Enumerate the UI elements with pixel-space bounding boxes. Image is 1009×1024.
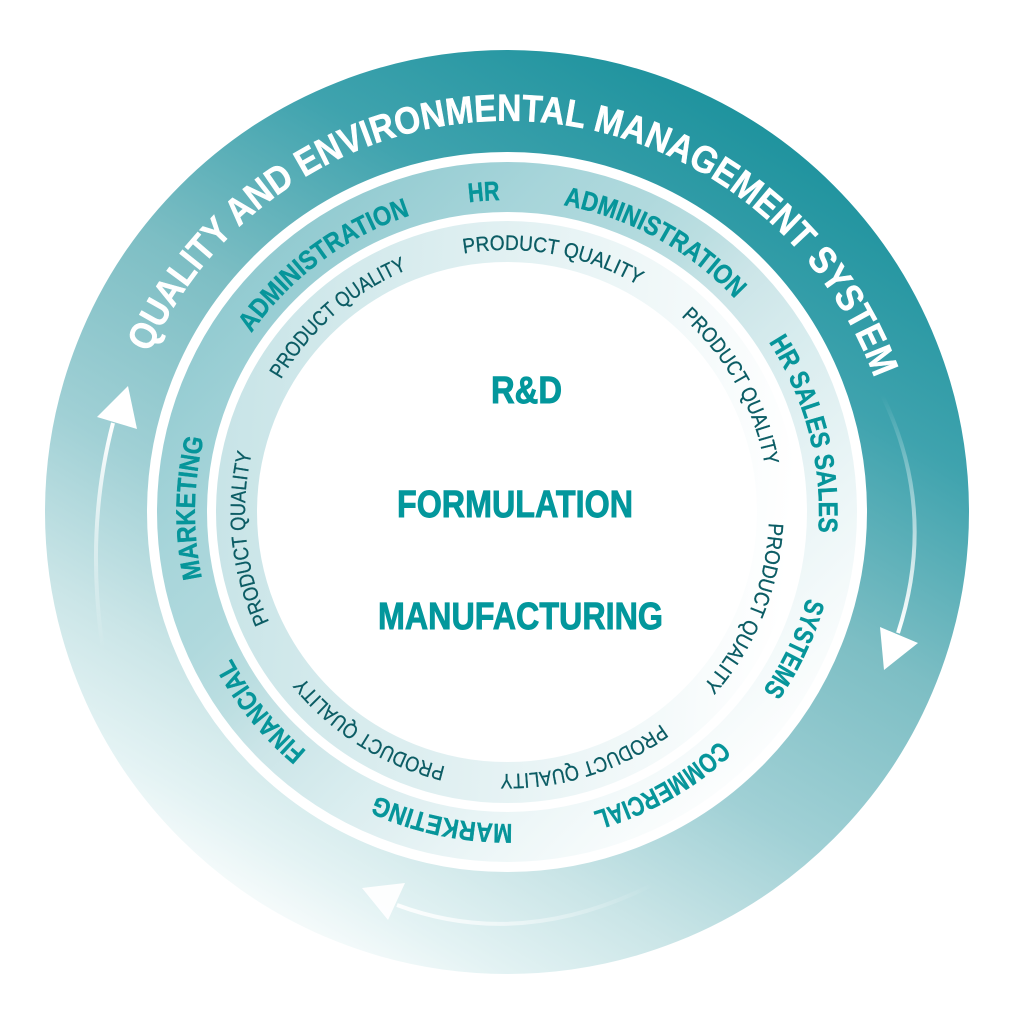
label: product quality lower right: PRODUCT QUALITY <box>500 724 668 789</box>
label: marketing bottom: MARKETING <box>372 798 512 843</box>
middle ring: business functions <box>157 162 857 862</box>
label: commercial: COMMERCIAL <box>594 744 729 828</box>
label: product quality upper right: PRODUCT QUALITY <box>682 306 780 462</box>
arrow: bottom, pointing left <box>362 883 652 924</box>
label: product quality lower left: PRODUCT QUALITY <box>292 680 444 780</box>
label: administration left: ADMINISTRATION <box>240 198 409 333</box>
label: HR: HR <box>468 182 500 202</box>
ring title: QUALITY AND ENVIRONMENTAL MANAGEMENT SYSTEM <box>130 94 898 376</box>
label: product quality upper left: PRODUCT QUALITY <box>269 256 402 378</box>
label: marketing left: MARKETING <box>176 436 203 580</box>
label: systems: SYSTEMS <box>765 600 824 698</box>
label: product quality left: PRODUCT QUALITY <box>230 450 269 627</box>
arrow: left, pointing up <box>96 386 137 650</box>
label: product quality top: PRODUCT QUALITY <box>463 235 646 283</box>
label: administration right: ADMINISTRATION <box>564 188 748 298</box>
centre heading: formulation: FORMULATION <box>397 484 633 526</box>
centre heading: manufacturing: MANUFACTURING <box>378 596 663 638</box>
label: financial: FINANCIAL <box>219 658 306 764</box>
label: product quality right: PRODUCT QUALITY <box>706 524 784 696</box>
centre heading: R&D: R&D <box>491 370 562 412</box>
inner ring: product quality <box>216 221 784 803</box>
label: HR sales sales: HR SALES SALES <box>769 333 838 532</box>
arrow: right, pointing down <box>880 395 918 670</box>
